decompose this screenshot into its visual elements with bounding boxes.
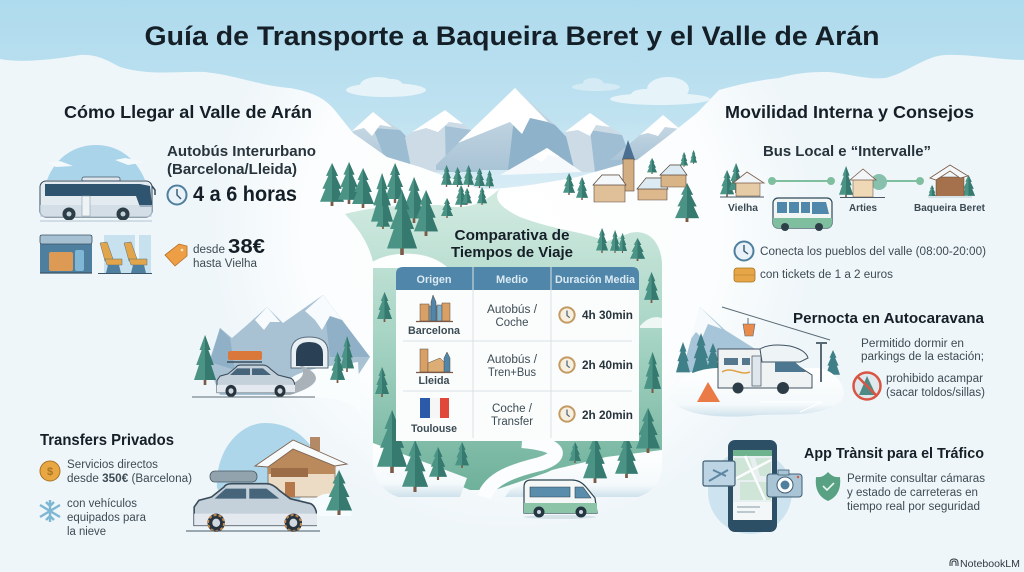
row: Barcelona: [408, 295, 633, 337]
block: coach title and time: [167, 144, 316, 206]
icon: shield: [816, 472, 840, 501]
illustration: transit app phone: [703, 440, 802, 534]
block: coach price: 38€: [228, 236, 265, 258]
heading: app transit: App Trànsit para el Tráfico: [804, 445, 984, 462]
row: Toulouse: Transfer: [491, 416, 533, 428]
icon: luggage compartment: [40, 235, 92, 273]
block: bus schedule: [734, 242, 986, 260]
illustration: chalet and SUV with chains: [186, 423, 352, 532]
icon: snowflake: [40, 500, 60, 522]
block: coach title and time: (Barcelona/Lleida): [167, 162, 297, 178]
heading: comparativa: [451, 227, 573, 261]
row: Toulouse: Coche /: [492, 403, 533, 415]
row: Lleida: Autobús /: [487, 354, 538, 366]
heading: movilidad: Movilidad Interna y Consejos: [725, 102, 974, 122]
icon: price tag: [165, 244, 187, 266]
icon: interurban coach: [40, 158, 155, 222]
heading: comparativa: Comparativa de: [454, 227, 570, 244]
heading: pernocta: Pernocta en Autocaravana: [793, 310, 985, 327]
block: overnight rules: [854, 338, 985, 400]
illustration: car and tunnel: [192, 295, 370, 415]
heading: bus local: Bus Local e “Intervalle”: [763, 144, 931, 160]
icon: ticket: [734, 268, 755, 282]
row: Toulouse: [411, 398, 633, 435]
heading: transfers: Transfers Privados: [40, 432, 174, 449]
icon: clock: [734, 242, 754, 260]
watermark: NotebookLM: [960, 559, 1020, 570]
stop: Arties: [839, 166, 887, 214]
background: sky: [0, 0, 1024, 200]
table header: Origen: [416, 274, 452, 286]
river road: [484, 441, 556, 497]
table header: Duración Media: [555, 274, 636, 286]
block: bus schedule: Conecta los pueblos del valle (08:00-20:00): [760, 246, 986, 258]
block: ticket price: con tickets de 1 a 2 euros: [760, 269, 893, 281]
comparison table: [396, 267, 639, 441]
row: Barcelona: Autobús /: [487, 304, 538, 316]
icon: sky behind coach: [47, 145, 145, 180]
block: coach title and time: 4 a 6 horas: [193, 183, 297, 206]
stop: Arties: Arties: [849, 202, 877, 214]
block: app description: y estado de carreteras en: [847, 487, 978, 499]
stop: Baqueira Beret: Baqueira Beret: [914, 202, 985, 214]
illustration: village with church: [593, 140, 687, 202]
block: coach price: [165, 236, 265, 270]
row: Toulouse: 2h 20min: [582, 410, 633, 422]
row: Barcelona: Coche: [496, 317, 528, 329]
block: coach title and time: Autobús Interurbano: [167, 144, 316, 160]
route diagram: [720, 163, 985, 231]
row: Toulouse: Toulouse: [411, 423, 457, 435]
heading: como llegar: Cómo Llegar al Valle de Arán: [64, 102, 312, 122]
icon: coin: $: [47, 466, 53, 478]
block: app description: Permite consultar cámaras: [847, 473, 985, 485]
icon: coach seats: [98, 235, 152, 274]
icon: road camera card: [703, 461, 735, 486]
illustration: snowy mountain range: [335, 88, 682, 175]
block: coach price: hasta Vielha: [193, 258, 258, 270]
row: Lleida: Tren+Bus: [488, 367, 536, 379]
snow mound right: [505, 450, 662, 497]
block: overnight rules: prohibido acampar: [886, 373, 983, 385]
row: Lleida: Lleida: [418, 375, 450, 387]
icon: green van on road: [524, 480, 597, 519]
heading: comparativa: Tiempos de Viaje: [451, 244, 573, 261]
icon: no camping: [854, 372, 880, 400]
illustration: motorhome scene: [670, 307, 844, 417]
icon: local bus: [773, 198, 832, 231]
panel: green valley backdrop: [345, 183, 662, 497]
block: overnight rules: (sacar toldos/sillas): [886, 387, 985, 399]
illustration: pine forest: [320, 150, 699, 236]
block: transfer prices: desde 350€ (Barcelona): [67, 473, 192, 485]
snow mound left: [373, 443, 467, 497]
block: transfer prices: [40, 459, 192, 485]
block: coach price: desde: [193, 244, 225, 256]
icon: coin: [40, 461, 60, 481]
block: overnight rules: parkings de la estación;: [861, 351, 984, 363]
block: transfer prices: Servicios directos: [67, 459, 158, 471]
block: snow equipment: con vehículos: [67, 498, 137, 510]
block: overnight rules: Permitido dormir en: [861, 338, 964, 350]
icon: camera: [767, 470, 802, 497]
icon: clock: [168, 186, 186, 204]
row: Lleida: [416, 349, 633, 387]
icon: notebook logo: [950, 559, 958, 566]
row: Lleida: 2h 40min: [582, 360, 633, 372]
stop: Vielha: Vielha: [728, 202, 758, 214]
row: Barcelona: 4h 30min: [582, 310, 633, 322]
clouds: [346, 77, 710, 105]
table header: [416, 274, 636, 286]
block: snow equipment: equipados para: [67, 512, 147, 524]
title: Guía de Transporte a Baqueira Beret y el Valle de Arán: [144, 21, 880, 51]
route line: [768, 178, 924, 184]
trees around comparison panel: [375, 190, 661, 492]
table header: Medio: [496, 274, 528, 286]
stop: Vielha: [720, 163, 764, 214]
block: snow equipment: la nieve: [67, 526, 106, 538]
block: app description: tiempo real por seguridad: [847, 501, 980, 513]
row: Barcelona: Barcelona: [408, 325, 461, 337]
stop: Baqueira Beret: [914, 165, 985, 214]
block: snow equipment: [40, 498, 147, 538]
block: app description: [816, 472, 985, 513]
